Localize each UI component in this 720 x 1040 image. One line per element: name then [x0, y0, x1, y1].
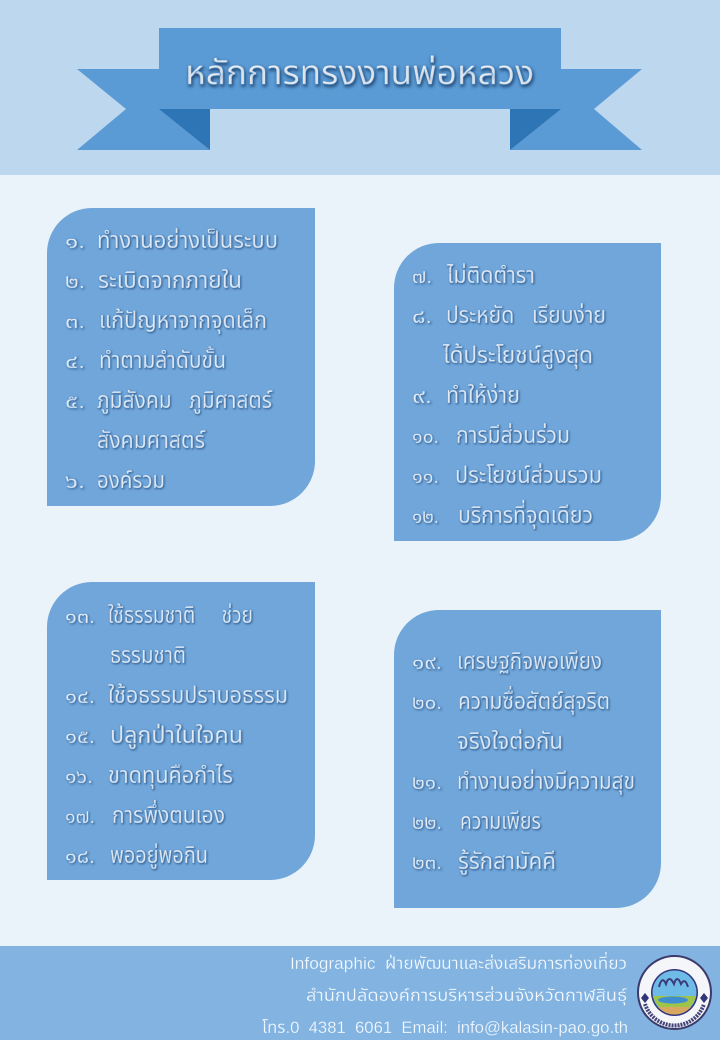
panel: principles 19 to 23: ๒๐.	[412, 692, 442, 714]
panel: principles 1 to 6: ๑.	[65, 231, 85, 253]
header band	[0, 0, 720, 175]
panel: principles 1 to 6: ระเบิดจากภายใน	[98, 267, 242, 293]
panel: principles 1 to 6: ๔.	[65, 351, 85, 373]
panel: principles 1 to 6: ทำตามลำดับขั้น	[99, 345, 226, 373]
panel: principles 19 to 23: เศรษฐกิจพอเพียง	[457, 648, 602, 674]
panel: principles 19 to 23: จริงใจต่อกัน	[457, 728, 563, 754]
panel: principles 7 to 12: ๗.	[412, 266, 432, 288]
panel: principles 19 to 23: ๒๓.	[412, 852, 442, 874]
panel: principles 13 to 18: ๑๔.	[65, 686, 95, 708]
panel: principles 13 to 18: ๑๖.	[65, 766, 93, 788]
panel: principles 1 to 6: ๖.	[65, 471, 85, 493]
title: หลักการทรงงานพ่อหลวง	[185, 54, 534, 92]
panel: principles 7 to 12: บริการที่จุดเดียว	[458, 499, 593, 529]
panel: principles 7 to 12: ๘.	[412, 306, 432, 328]
panel: principles 13 to 18: ๑๓.	[65, 606, 95, 628]
panel: principles 1 to 6: ภูมิสังคม ภูมิศาสตร์	[97, 387, 273, 415]
panel: principles 7 to 12	[394, 243, 661, 541]
ribbon banner	[77, 28, 642, 150]
panel: principles 19 to 23: รู้รักสามัคคี	[458, 848, 556, 876]
footer text	[262, 951, 628, 1037]
panel: principles 13 to 18	[47, 582, 315, 880]
panel: principles 7 to 12: การมีส่วนร่วม	[456, 422, 570, 448]
panel: principles 13 to 18: ใช้ธรรมชาติ ช่วย	[108, 602, 253, 628]
footer text: โทร.0 4381 6061 Email: info@kalasin-pao.go.th	[262, 1018, 628, 1037]
panel: principles 7 to 12: ได้ประโยชน์สูงสุด	[442, 342, 593, 370]
panel: principles 19 to 23: ความเพียร	[460, 808, 541, 834]
panel: principles 1 to 6: องค์รวม	[97, 467, 165, 493]
panel: principles 7 to 12: ๑๐.	[412, 426, 439, 448]
icon: provincial seal	[637, 955, 712, 1030]
panel: principles 7 to 12: ๙.	[412, 386, 432, 408]
panel: principles 13 to 18: ๑๕.	[65, 726, 95, 748]
panel: principles 13 to 18: ธรรมชาติ	[110, 642, 186, 668]
panel: principles 1 to 6	[47, 208, 315, 506]
footer text: สำนักปลัดองค์การบริหารส่วนจังหวัดกาฬสินธุ์	[306, 986, 627, 1006]
panel: principles 1 to 6: ๓.	[65, 311, 85, 333]
panel: principles 19 to 23: ๑๙.	[412, 652, 442, 674]
panel: principles 13 to 18: พออยู่พอกิน	[110, 842, 208, 870]
panel: principles 13 to 18: ใช้อธรรมปราบอธรรม	[108, 682, 288, 708]
panel: principles 7 to 12: ไม่ติดตำรา	[446, 262, 535, 288]
panel: principles 1 to 6: แก้ปัญหาจากจุดเล็ก	[99, 307, 267, 334]
panel: principles 19 to 23: ๒๒.	[412, 812, 442, 834]
panel: principles 7 to 12: ประหยัด เรียบง่าย	[446, 302, 606, 328]
panel: principles 1 to 6: ทำงานอย่างเป็นระบบ	[97, 227, 278, 253]
panel: principles 13 to 18: การพึ่งตนเอง	[112, 799, 225, 828]
panel: principles 19 to 23: ๒๑.	[412, 772, 442, 794]
panel: principles 19 to 23: ทำงานอย่างมีความสุข	[457, 768, 635, 795]
panel: principles 13 to 18: ๑๗.	[65, 806, 95, 828]
panel: principles 7 to 12: ๑๑.	[412, 466, 439, 488]
panel: principles 7 to 12: ทำให้ง่าย	[446, 382, 520, 408]
panel: principles 7 to 12: ประโยชน์ส่วนรวม	[455, 462, 602, 488]
panel: principles 1 to 6: ๕.	[65, 391, 85, 413]
panel: principles 1 to 6: ๒.	[65, 271, 85, 293]
panel: principles 19 to 23	[394, 610, 661, 908]
panel: principles 19 to 23: ความซื่อสัตย์สุจริต	[458, 685, 610, 715]
panel: principles 13 to 18: ขาดทุนคือกำไร	[108, 762, 233, 789]
footer text: Infographic ฝ่ายพัฒนาและส่งเสริมการท่องเที่ยว	[290, 951, 627, 973]
panel: principles 13 to 18: ๑๘.	[65, 846, 95, 868]
footer band	[0, 946, 720, 1040]
panel: principles 1 to 6: สังคมศาสตร์	[97, 427, 206, 453]
panel: principles 7 to 12: ๑๒.	[412, 506, 439, 528]
panel: principles 13 to 18: ปลูกป่าในใจคน	[110, 722, 243, 750]
